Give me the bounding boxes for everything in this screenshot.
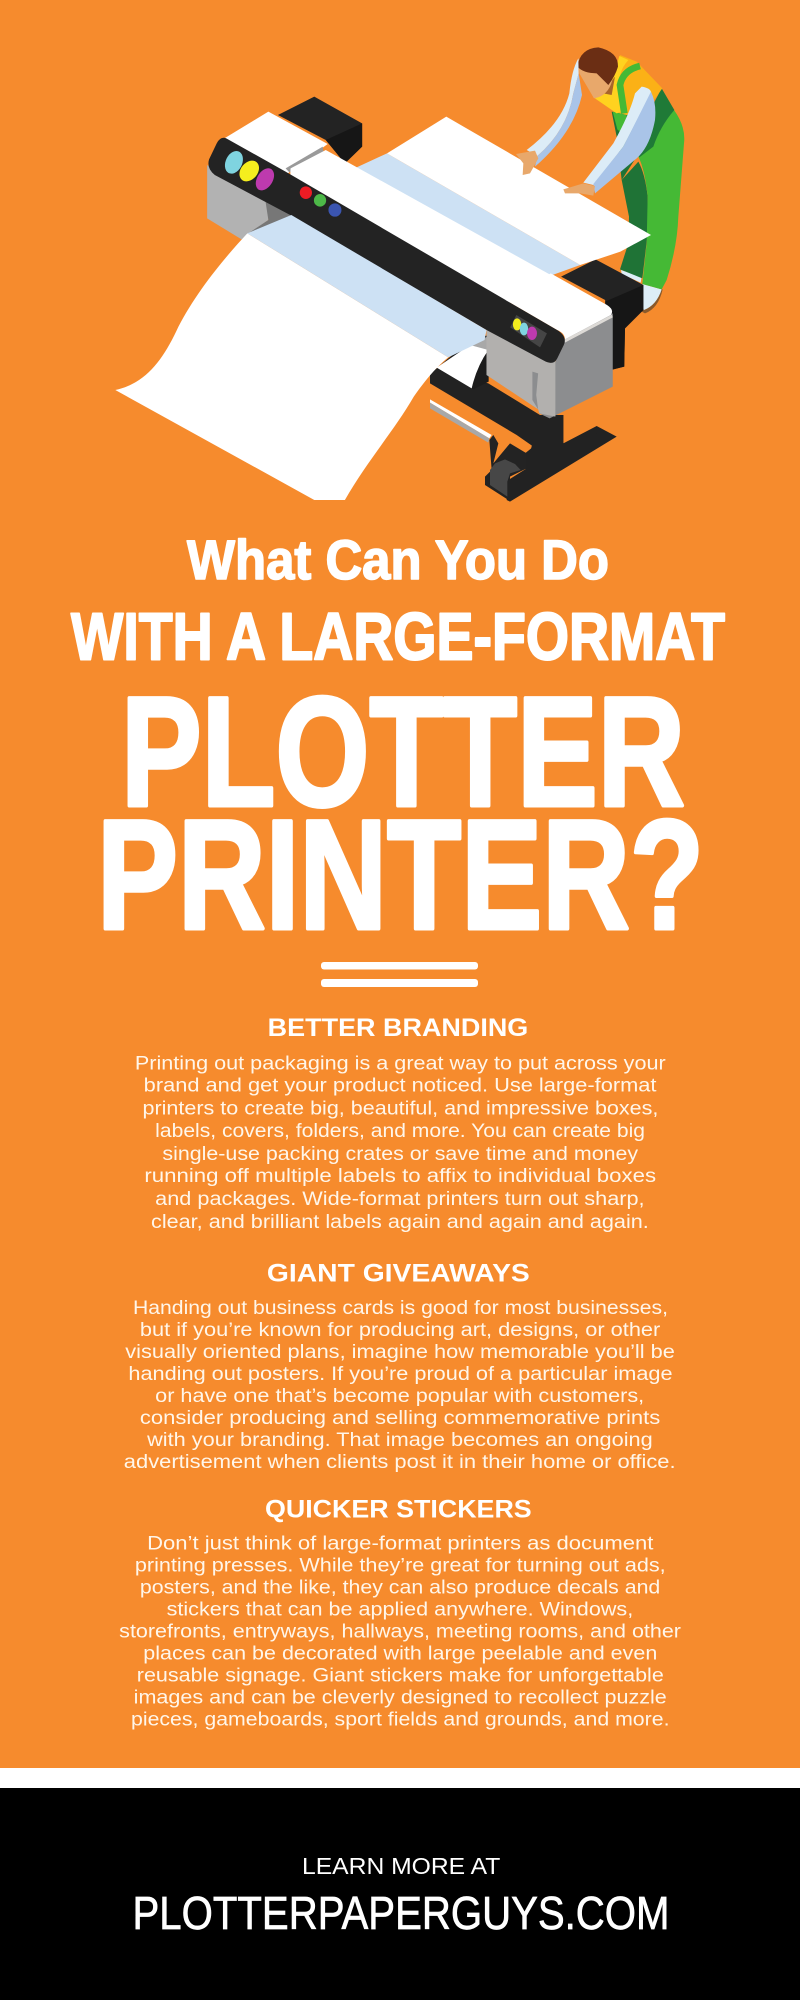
printer body (207, 112, 613, 418)
section: giant giveaways (124, 1260, 676, 1473)
body text: quicker stickers: posters, and the like, they can also produce decals and (140, 1577, 660, 1598)
small ink panel (510, 315, 547, 347)
body text: better branding (135, 1053, 666, 1233)
body text: better branding: labels, covers, folders, and more. You can create big (155, 1121, 645, 1142)
body text: better branding: running off multiple labels to affix to individual boxes (144, 1166, 656, 1187)
right cover (506, 273, 612, 339)
dark slot behind curled paper (437, 335, 489, 389)
black control bar (208, 138, 565, 363)
body text: quicker stickers: Don’t just think of large-format printers as document (147, 1533, 654, 1554)
illustration: person upper body (516, 47, 662, 196)
control buttons (300, 186, 312, 199)
body text: quicker stickers: stickers that can be applied anywhere. Windows, (167, 1599, 633, 1620)
body text: better branding: printers to create big, beautiful, and impressive boxes, (142, 1098, 658, 1119)
divider: double rule (321, 962, 478, 987)
heading: quicker stickers: QUICKER STICKERS (265, 1495, 532, 1523)
body text: giant giveaways: Handing out business cards is good for most businesses, (133, 1298, 668, 1319)
body text: giant giveaways: handing out posters. If you’re proud of a particular image (128, 1364, 673, 1385)
body text: giant giveaways: advertisement when clients post it in their home or office. (124, 1452, 676, 1473)
body text: giant giveaways: or have one that’s become popular with customers, (155, 1386, 644, 1407)
title (71, 528, 725, 962)
curled paper (437, 345, 488, 388)
body text: giant giveaways: but if you’re known for producing art, designs, or other (140, 1320, 661, 1341)
body text: quicker stickers: pieces, gameboards, sport fields and grounds, and more. (131, 1710, 670, 1731)
paper feeding into the back of the printer (354, 117, 651, 277)
heading: better branding: BETTER BRANDING (268, 1014, 528, 1042)
illustration: person legs (612, 88, 684, 313)
body text: better branding: Printing out packaging is a great way to put across your (135, 1053, 666, 1074)
body text: better branding: brand and get your product noticed. Use large-format (144, 1075, 657, 1096)
right gray housing (539, 313, 613, 418)
body text: quicker stickers: printing presses. While they’re great for turning out ads, (135, 1555, 666, 1576)
body text: giant giveaways: consider producing and selling commemorative prints (140, 1408, 660, 1429)
printer stand (430, 335, 617, 502)
heading: giant giveaways: GIANT GIVEAWAYS (267, 1260, 530, 1288)
body text: giant giveaways (124, 1298, 676, 1473)
body text: quicker stickers: images and can be cleverly designed to recollect puzzle (134, 1688, 667, 1709)
printed paper coming out (115, 215, 486, 500)
body text: better branding: and packages. Wide-format printers turn out sharp, (155, 1189, 645, 1210)
left gray housing (207, 165, 268, 239)
body text: quicker stickers (119, 1533, 682, 1731)
body text: giant giveaways: with your branding. That image becomes an ongoing (146, 1430, 653, 1451)
footer url: PLOTTERPAPERGUYS.COM (132, 1887, 670, 1939)
footer label: LEARN MORE AT (302, 1853, 500, 1879)
body text: better branding: clear, and brilliant labels again and again and again. (151, 1212, 649, 1233)
printer rear blocks (278, 97, 643, 370)
footer (0, 1788, 800, 2000)
section: better branding (135, 1014, 666, 1233)
body text: quicker stickers: places can be decorated with large peelable and even (143, 1644, 657, 1665)
white strip (290, 150, 551, 305)
left cover (224, 112, 328, 175)
section: quicker stickers (119, 1495, 682, 1731)
body text: better branding: single-use packing crates or save time and money (162, 1144, 639, 1165)
body text: quicker stickers: reusable signage. Giant stickers make for unforgettable (137, 1666, 664, 1687)
body text: quicker stickers: storefronts, entryways, hallways, meeting rooms, and other (119, 1622, 682, 1643)
body text: giant giveaways: visually oriented plans, imagine how memorable you’ll be (125, 1342, 675, 1363)
white band (0, 1768, 800, 1788)
ink cartridges (222, 149, 246, 176)
title line 1: What Can You Do (187, 528, 609, 591)
